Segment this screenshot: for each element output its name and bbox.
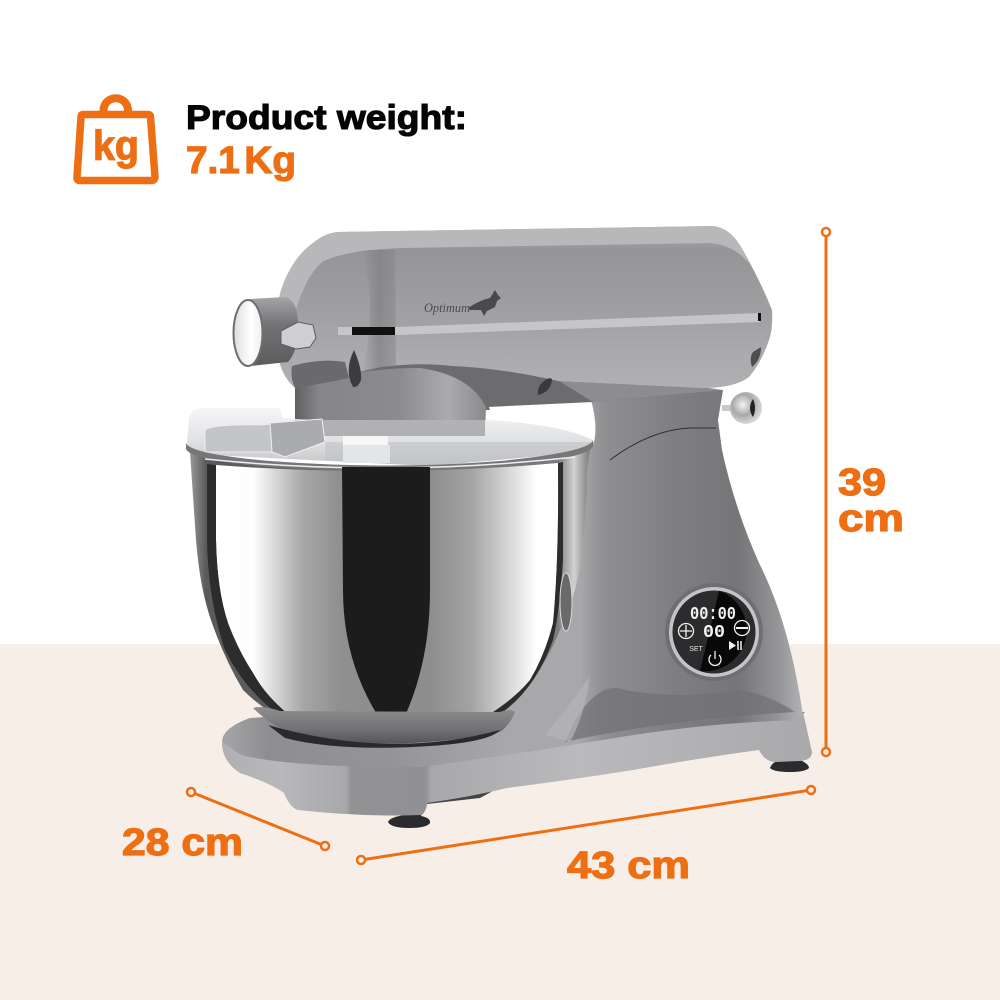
depth label: 28 cm: [122, 822, 243, 864]
bowl rim highlight: [205, 457, 575, 468]
chrome trim dark section: [352, 327, 395, 335]
heading: product weight: [186, 99, 467, 182]
front vent: [349, 350, 361, 387]
bowl left dark band: [207, 464, 288, 714]
rear foot: [770, 760, 809, 772]
bowl base ring: [253, 707, 515, 744]
rear vent: [751, 347, 761, 367]
pedestal joint line: [610, 428, 716, 460]
icon: kg weight bag: kg: [93, 122, 139, 169]
height dimension line: [822, 228, 830, 756]
height label: 39: [838, 462, 886, 504]
Optimum logo: Optimum: [424, 300, 470, 315]
pedestal body: [480, 390, 803, 752]
bowl lid: [187, 408, 593, 466]
head lower left shadow: [291, 361, 349, 388]
stand mixer product illustration: [186, 226, 812, 828]
bowl inner reflection: [216, 463, 558, 712]
mixer base plate: [222, 712, 812, 815]
width label: 43 cm: [567, 845, 690, 887]
bowl right reflected vent: [560, 573, 572, 631]
front attachment hub: [234, 297, 338, 366]
heading: product weight: Product weight:: [186, 99, 467, 137]
control panel: 00: [703, 623, 725, 643]
pedestal highlight: [545, 675, 590, 742]
head top rim highlight: [279, 226, 750, 310]
front foot: [388, 803, 430, 828]
width dimension line: [357, 786, 815, 864]
bowl black reflection stripe: [342, 467, 430, 716]
Optimum logo: [424, 290, 501, 316]
icon: kg weight bag: [77, 98, 155, 180]
head left fold shading: [362, 250, 396, 372]
head underside wedge: [440, 360, 723, 407]
height label: [838, 462, 904, 540]
head underside light edge: [559, 381, 723, 402]
control panel: SET: [689, 646, 704, 653]
head neck backing: [295, 355, 490, 410]
head neck column: [295, 368, 486, 436]
height label: cm: [838, 498, 904, 540]
floor background band: [0, 644, 1000, 1000]
chrome trim band: [338, 313, 760, 335]
depth dimension line: [187, 788, 329, 850]
mixing bowl outer shell: [190, 450, 590, 712]
bowl seat shadow: [268, 725, 500, 748]
hinge ball: [722, 392, 762, 424]
bowl right dark band: [490, 462, 563, 714]
middle vent: [538, 378, 552, 395]
pedestal lower shading: [565, 688, 795, 742]
motor head shell: [276, 226, 772, 388]
control panel: 00:00: [690, 605, 736, 625]
heading: product weight: 7.1 Kg: [186, 140, 296, 182]
bowl rim: [186, 440, 593, 471]
control panel: [665, 583, 763, 681]
base top surface: [222, 700, 805, 767]
chrome trim rear tip: [758, 313, 761, 321]
under-base shadow: [427, 786, 502, 804]
